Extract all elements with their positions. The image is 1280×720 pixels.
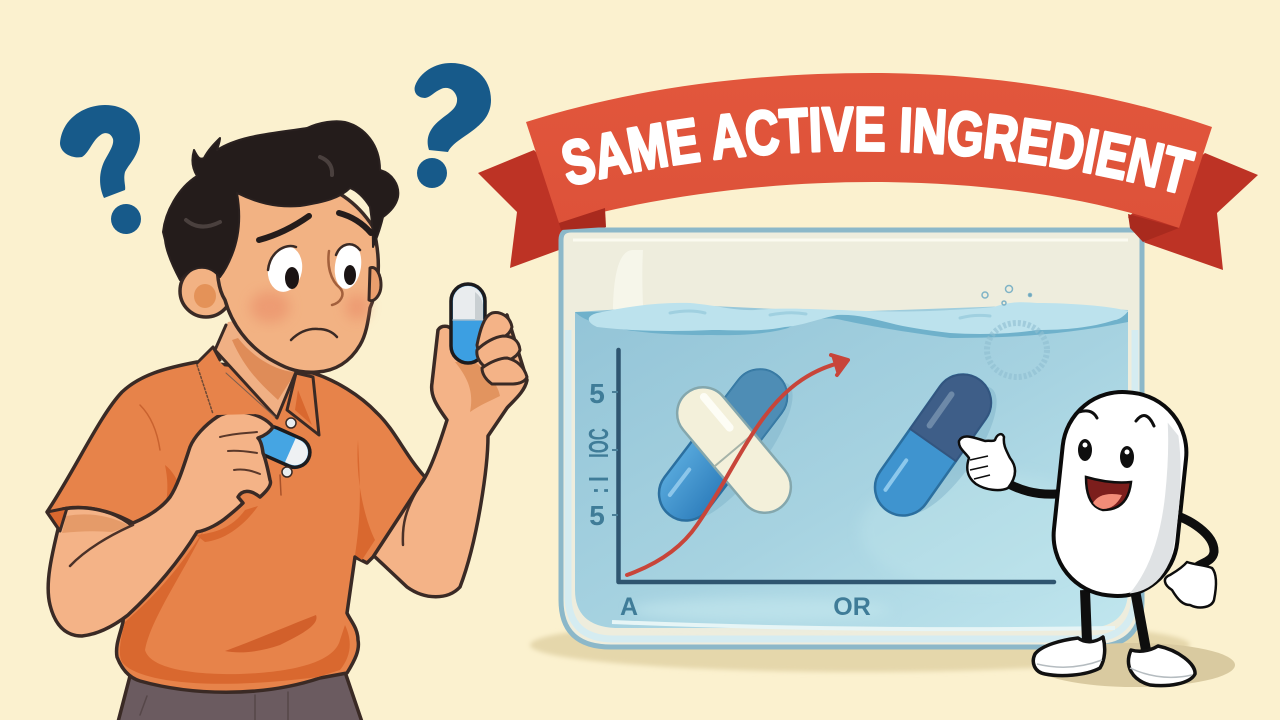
viewer-left arm and hand bbox=[47, 412, 273, 636]
nose bbox=[328, 251, 342, 305]
ear bbox=[180, 265, 232, 317]
icon: right question mark bbox=[415, 63, 491, 188]
dissolving ring bbox=[987, 323, 1047, 377]
mascot mouth bbox=[1086, 477, 1131, 510]
held capsule bbox=[451, 284, 485, 363]
axis labels: IOC bbox=[583, 428, 614, 458]
small bubbles bbox=[282, 418, 296, 477]
axis labels: A bbox=[620, 593, 638, 621]
mascot arms bbox=[1007, 483, 1214, 566]
water body bbox=[575, 305, 1128, 628]
held hand fingers bbox=[477, 313, 527, 384]
hair shine bbox=[186, 157, 332, 227]
axis labels: 5 bbox=[589, 378, 605, 409]
banner main bbox=[526, 73, 1212, 228]
mascot eyes bbox=[1078, 439, 1134, 468]
glass rim and bottom bbox=[561, 230, 1142, 647]
axis labels: 5 bbox=[589, 500, 605, 531]
water surface band bbox=[589, 302, 1128, 334]
bar chart axes bbox=[583, 350, 1054, 621]
banner fold shadows bbox=[559, 208, 1179, 242]
mascot body bbox=[1048, 386, 1192, 602]
cheek blush bbox=[250, 291, 369, 323]
banner tails bbox=[478, 150, 1258, 270]
mascot shoes bbox=[1033, 637, 1195, 686]
panel: glass beaker with water bbox=[561, 230, 1142, 647]
mascot legs bbox=[1085, 590, 1146, 650]
ground shadow under glass bbox=[530, 618, 1190, 672]
axis labels bbox=[583, 378, 871, 621]
bubbles bbox=[982, 286, 1032, 305]
mascot shadow bbox=[1035, 643, 1235, 687]
surface ripples bbox=[670, 311, 990, 318]
hair bbox=[163, 121, 398, 280]
icon: white capsule bbox=[667, 377, 801, 523]
character: smiling pill mascot bbox=[959, 386, 1235, 687]
icon: dark blue capsule bbox=[864, 363, 1013, 535]
viewer-right arm and palm bbox=[373, 315, 527, 597]
eyes bbox=[264, 241, 364, 295]
arrow: rising red curve bbox=[627, 355, 848, 575]
soft lighter water patches bbox=[630, 470, 1100, 622]
heading: same active ingredient: SAME ACTIVE INGREDIENT bbox=[562, 106, 1196, 194]
character: confused man bbox=[47, 121, 527, 720]
mascot brows bbox=[1079, 411, 1154, 426]
trousers bbox=[118, 672, 362, 720]
pinched capsule bbox=[251, 422, 315, 472]
mouth bbox=[291, 329, 337, 340]
mascot resting hand bbox=[1165, 562, 1216, 607]
water surface rim bbox=[575, 312, 1128, 338]
axis labels: : I bbox=[584, 476, 615, 494]
icon: left question mark bbox=[60, 105, 141, 234]
face bbox=[217, 179, 381, 372]
shirt body bbox=[47, 362, 425, 692]
eyebrows bbox=[259, 213, 371, 240]
neck and collar bbox=[197, 320, 319, 435]
mascot pointing hand bbox=[959, 434, 1015, 490]
axis labels: OR bbox=[833, 593, 871, 621]
icon: blue capsule behind bbox=[648, 359, 810, 540]
